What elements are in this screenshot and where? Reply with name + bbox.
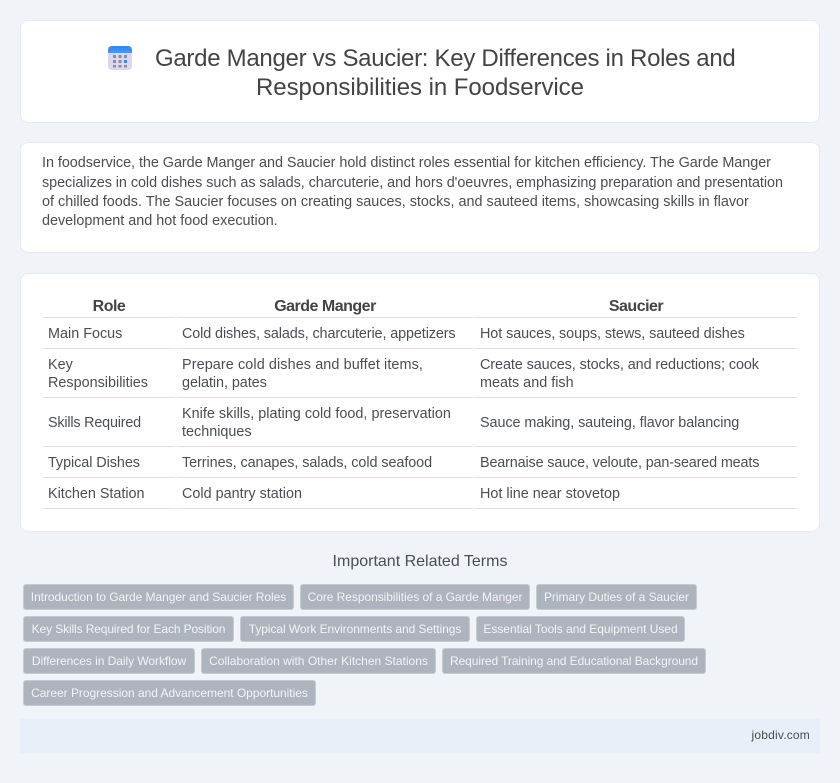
text: description: development and hot food execution.	[42, 213, 278, 229]
row: typical dishes: Typical Dishes	[48, 455, 140, 471]
row: typical dishes: Bearnaise sauce, veloute, pan-seared meats	[480, 455, 759, 471]
tags: related terms: Primary Duties of a Saucier	[544, 590, 689, 604]
tags: related terms: Key Skills Required for Each Position	[32, 622, 225, 636]
row: kitchen station: Kitchen Station	[48, 486, 144, 502]
row: key responsibilities: Prepare cold dishes and buffet items,	[182, 357, 423, 373]
tags: related terms	[23, 584, 706, 706]
row: typical dishes: Terrines, canapes, salads, cold seafood	[182, 455, 432, 471]
row: skills required: techniques	[182, 424, 252, 440]
text: description	[42, 155, 783, 229]
text: description: specializes in cold dishes such as salads, charcuterie, and hors d'oeuvres, emphasizing preparation and presentation	[42, 175, 783, 191]
table header: Role	[93, 298, 125, 315]
footer text: jobdiv.com	[752, 728, 810, 742]
tags: related terms: Required Training and Educational Background	[450, 654, 698, 668]
row: key responsibilities: Responsibilities	[48, 375, 148, 391]
row: skills required	[48, 406, 739, 440]
text: description: In foodservice, the Garde Manger and Saucier hold distinct roles essential for kitchen efficiency. The Garde Manger	[42, 155, 771, 171]
heading: related terms: Important Related Terms	[333, 553, 507, 570]
panel: description	[20, 142, 820, 253]
title card	[20, 20, 820, 123]
tags: related terms: Typical Work Environments and Settings	[249, 622, 461, 636]
tags: related terms: Career Progression and Advancement Opportunities	[31, 686, 308, 700]
title: Responsibilities in Foodservice	[256, 74, 584, 101]
icon: calendar	[108, 46, 132, 70]
tags: related terms: Core Responsibilities of a Garde Manger	[308, 590, 522, 604]
table header: Saucier	[609, 298, 663, 315]
tags: related terms: Collaboration with Other Kitchen Stations	[209, 654, 428, 668]
row: key responsibilities	[48, 357, 759, 391]
row: skills required: Knife skills, plating cold food, preservation	[182, 406, 451, 422]
row: skills required: Skills Required	[48, 415, 141, 431]
title: Garde Manger vs Saucier: Key Differences in Roles and	[155, 45, 735, 72]
footer bar	[20, 719, 820, 753]
title	[155, 45, 735, 101]
row: key responsibilities: Key	[48, 357, 73, 373]
row: skills required: Sauce making, sauteing, flavor balancing	[480, 415, 739, 431]
row: typical dishes	[48, 455, 759, 471]
table header	[93, 298, 664, 315]
row: key responsibilities: gelatin, pates	[182, 375, 267, 391]
row: kitchen station: Cold pantry station	[182, 486, 302, 502]
row: main focus	[48, 326, 745, 342]
tags: related terms: Differences in Daily Workflow	[32, 654, 186, 668]
tags: related terms: Introduction to Garde Manger and Saucier Roles	[31, 590, 286, 604]
row: kitchen station: Hot line near stovetop	[480, 486, 620, 502]
row: key responsibilities: meats and fish	[480, 375, 574, 391]
row: main focus: Hot sauces, soups, stews, sauteed dishes	[480, 326, 745, 342]
table header: Garde Manger	[274, 298, 376, 315]
row: main focus: Main Focus	[48, 326, 122, 342]
row: main focus: Cold dishes, salads, charcuterie, appetizers	[182, 326, 456, 342]
row: kitchen station	[48, 486, 620, 502]
tags: related terms: Essential Tools and Equipment Used	[483, 622, 678, 636]
panel: comparison table	[20, 273, 820, 532]
text: description: of chilled foods. The Saucier focuses on creating sauces, stocks, and sauteed items, showcasing skills in flavor	[42, 194, 749, 210]
row: key responsibilities: Create sauces, stocks, and reductions; cook	[480, 357, 759, 373]
